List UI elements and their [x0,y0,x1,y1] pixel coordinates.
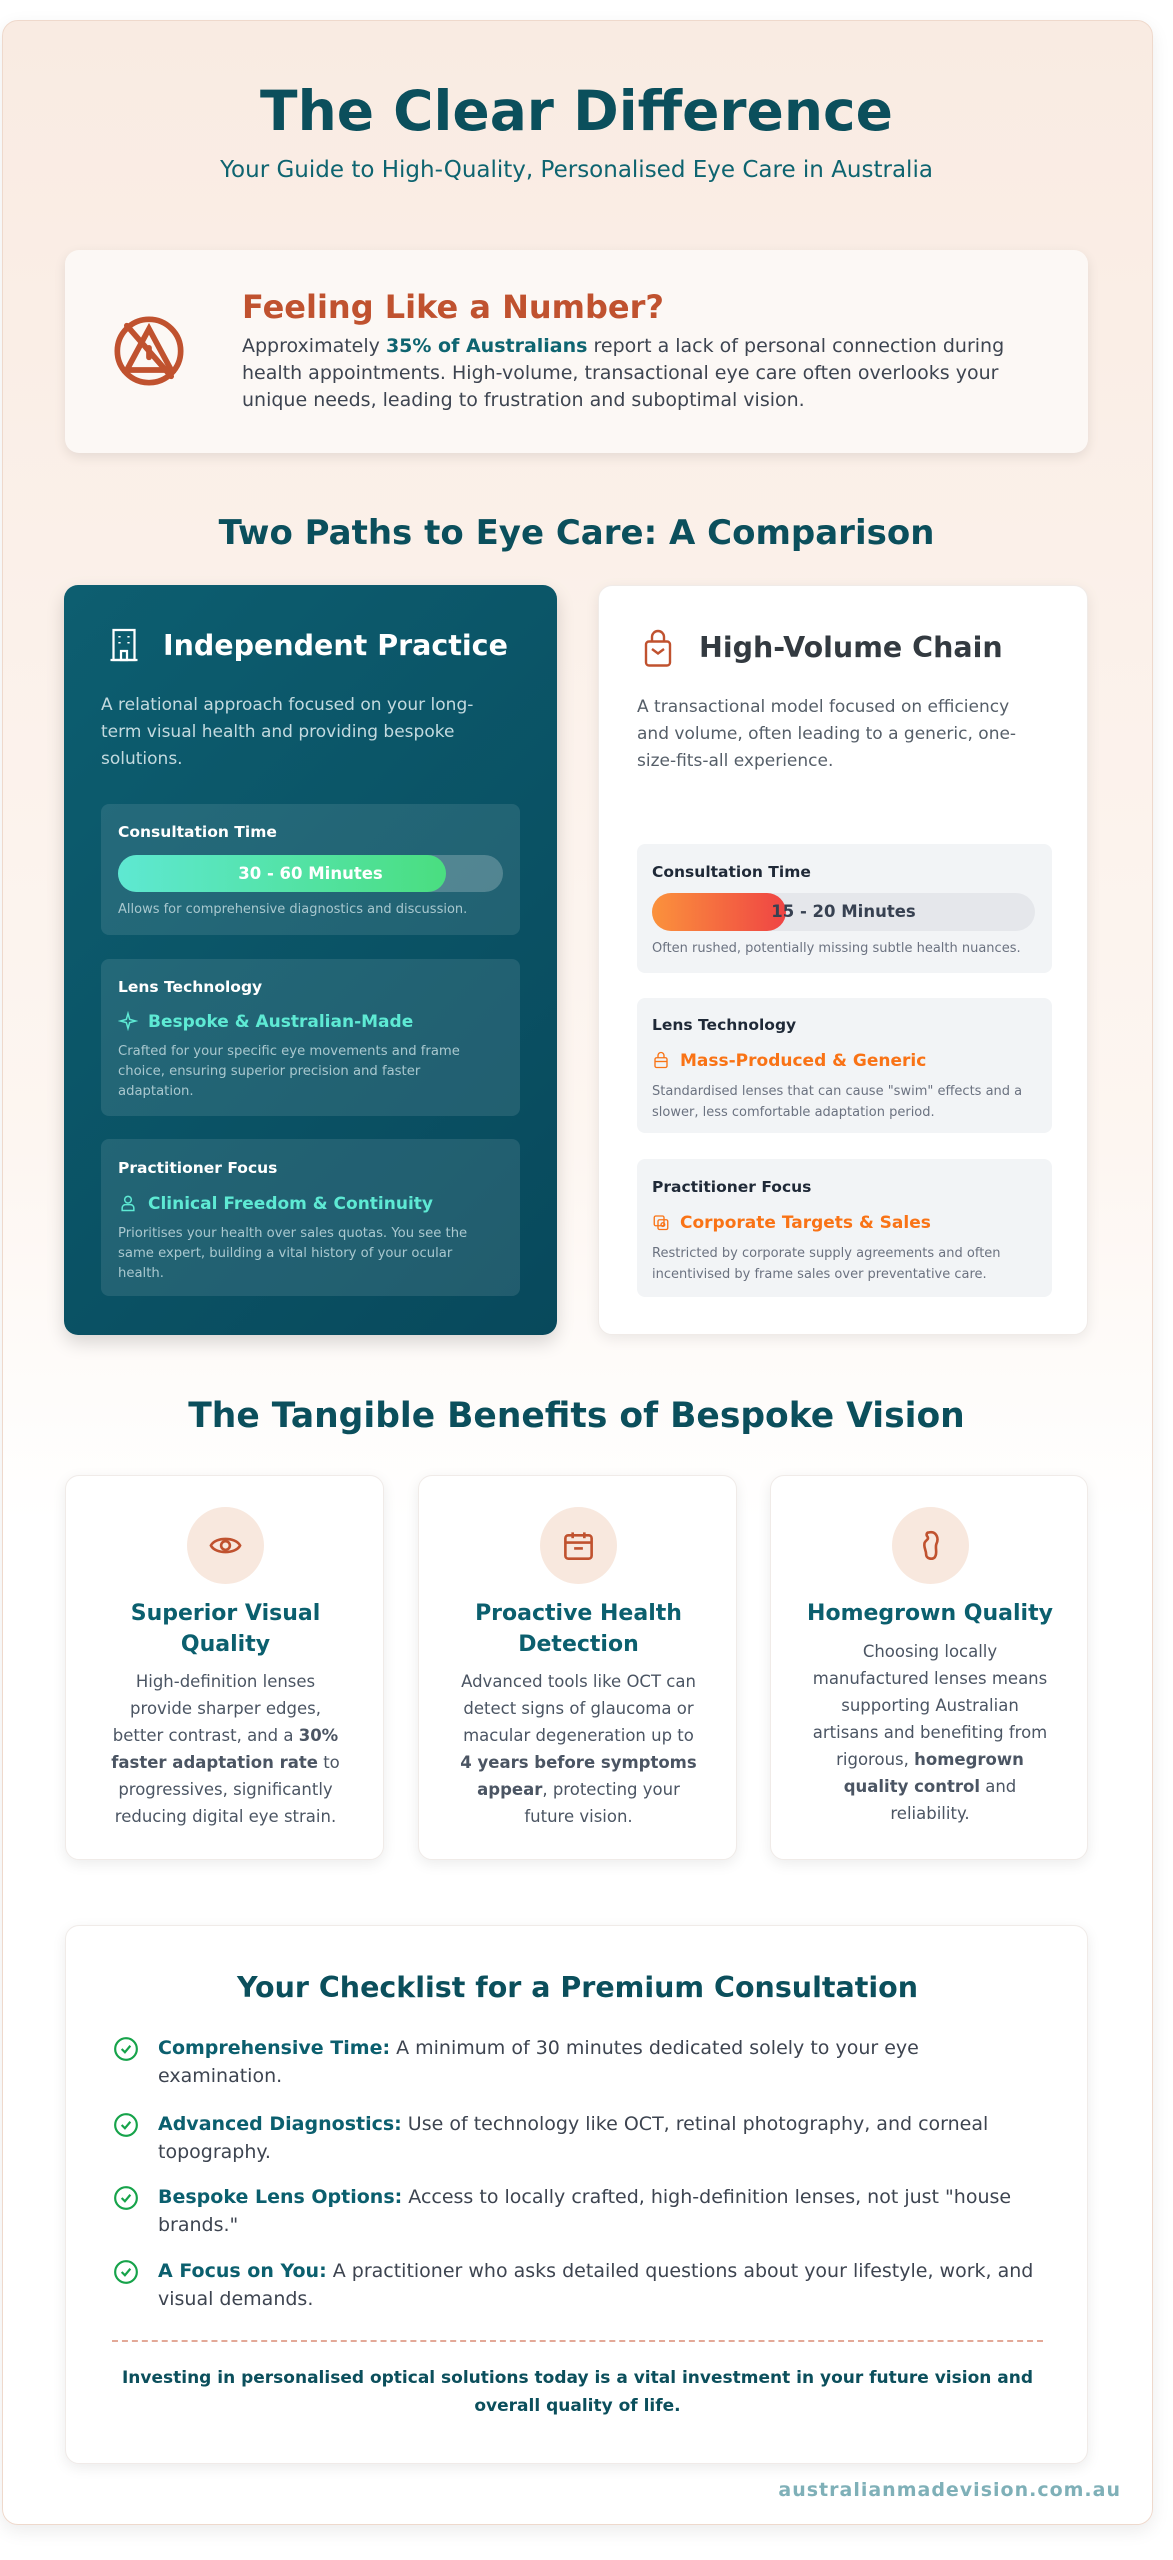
panel title: High-Volume Chain [699,631,1003,664]
box: consultation time [101,804,520,935]
card text: rigorous, homegrown [836,1750,1024,1769]
card text: reliability. [890,1804,970,1823]
box: practitioner focus: Practitioner Focus [652,1178,811,1196]
body text: health appointments. High-volume, transactional eye care often overlooks your [242,362,998,384]
item: bespoke lens options: brands." [158,2214,238,2236]
item: comprehensive time: examination. [158,2065,282,2087]
box: practitioner focus: Restricted by corporate supply agreements and often [652,1246,1001,1261]
card title: Quality [181,1632,270,1657]
box: lens technology [101,959,520,1116]
description: size-fits-all experience. [637,751,833,771]
card text: better contrast, and a 30% [113,1726,338,1745]
card text: 4 years before symptoms [460,1753,697,1772]
box: practitioner focus: Practitioner Focus [118,1159,277,1177]
box: consultation time: Consultation Time [652,863,811,881]
bar: 15-20 minutes: 15 - 20 Minutes [771,902,916,921]
bar: 30-60 minutes: 30 - 60 Minutes [238,864,383,883]
description [101,695,473,769]
card: homegrown quality [770,1475,1088,1860]
box: lens technology: slower, less comfortable adaptation period. [652,1105,935,1120]
card title: Detection [518,1632,639,1657]
panel: independent practice [64,585,557,1335]
closing statement [122,2368,1033,2416]
box: lens technology [637,998,1052,1133]
heading: comparison: Two Paths to Eye Care: A Comparison [219,513,934,553]
panel: checklist [65,1925,1088,2464]
card text: Choosing locally [863,1642,997,1661]
panel: high-volume chain [598,585,1088,1335]
subtitle: Your Guide to High-Quality, Personalised Eye Care in Australia [220,157,933,183]
item: comprehensive time: Comprehensive Time: A minimum of 30 minutes dedicated solely to your eye [158,2037,919,2059]
card text: supporting Australian [841,1696,1019,1715]
card text: quality control and [844,1777,1016,1796]
icon: warning crossed [114,316,184,386]
item: comprehensive time [114,2037,919,2087]
card text [460,1672,697,1826]
box: lens technology: choice, ensuring superior precision and faster [118,1064,420,1079]
highlight: mass produced: Mass-Produced & Generic [680,1051,926,1071]
card text: High-definition lenses [136,1672,315,1691]
item: advanced diagnostics: topography. [158,2141,271,2163]
box: consultation time [637,844,1052,973]
card: proactive health detection [418,1475,737,1860]
box: lens technology: adaptation. [118,1084,194,1099]
closing statement: Investing in personalised optical solutions today is a vital investment in your future vision and [122,2368,1033,2388]
description: solutions. [101,749,183,769]
item: bespoke lens options: Bespoke Lens Options: Access to locally crafted, high-definition lenses, not just "house [158,2186,1011,2208]
bar: 30-60 minutes [118,855,503,892]
highlight: bespoke: Bespoke & Australian-Made [148,1012,413,1032]
body text: Approximately 35% of Australians report a lack of personal connection during [242,335,1004,357]
card text: progressives, significantly [118,1780,333,1799]
body text: unique needs, leading to frustration and suboptimal vision. [242,389,805,411]
card text [813,1642,1047,1823]
card text: detect signs of glaucoma or [463,1699,694,1718]
card title [475,1601,682,1657]
box: practitioner focus [101,1139,520,1296]
card: superior visual quality [65,1475,384,1860]
box: lens technology: Lens Technology [118,978,262,996]
description: A relational approach focused on your long- [101,695,473,715]
item: focus on you: visual demands. [158,2288,313,2310]
box: lens technology: Lens Technology [652,1016,796,1034]
card title [131,1601,320,1657]
card text [111,1672,340,1826]
icon: calendar [540,1507,617,1584]
card text: provide sharper edges, [130,1699,321,1718]
box: practitioner focus: same expert, building a vital history of your ocular [118,1246,452,1261]
item: focus on you: A Focus on You: A practitioner who asks detailed questions about your lifestyle, work, and [158,2260,1033,2282]
body text [242,335,1004,411]
closing statement: overall quality of life. [474,2396,681,2416]
box: practitioner focus: Prioritises your health over sales quotas. You see the [118,1226,467,1241]
box: consultation time: Consultation Time [118,823,277,841]
heading: benefits: The Tangible Benefits of Bespoke Vision [188,1396,965,1436]
highlight: clinical freedom: Clinical Freedom & Continuity [148,1194,433,1214]
box: practitioner focus: incentivised by frame sales over preventative care. [652,1267,987,1282]
checklist heading: Your Checklist for a Premium Consultation [237,1971,918,2004]
card text: Advanced tools like OCT can [461,1672,696,1691]
title: The Clear Difference [260,79,893,143]
card text: macular degeneration up to [463,1726,694,1745]
box: lens technology: Crafted for your specific eye movements and frame [118,1044,460,1059]
card text: reducing digital eye strain. [115,1807,336,1826]
heading: Feeling Like a Number? [242,288,664,326]
description: A transactional model focused on efficiency [637,697,1009,717]
card title: Superior Visual [131,1601,320,1626]
card title: Proactive Health [475,1601,682,1626]
item: advanced diagnostics [114,2113,988,2163]
card text: artisans and benefiting from [813,1723,1047,1742]
description [637,697,1016,771]
card text: appear, protecting your [477,1780,680,1799]
card text: future vision. [524,1807,633,1826]
icon: eye [187,1507,264,1584]
card text: faster adaptation rate to [111,1753,340,1772]
footer url: australianmadevision.com.au [778,2479,1121,2501]
panel: feeling like a number [65,250,1088,453]
bar: 15-20 minutes [652,893,1035,931]
card title: Homegrown Quality [807,1601,1053,1626]
icon: map [892,1507,969,1584]
box: consultation time: Often rushed, potentially missing subtle health nuances. [652,941,1021,956]
box: lens technology: Standardised lenses that can cause "swim" effects and a [652,1084,1022,1099]
box: practitioner focus [637,1159,1052,1297]
box: consultation time: Allows for comprehensive diagnostics and discussion. [118,902,467,917]
icon: shopping bag [644,630,672,667]
item: focus on you [114,2260,1033,2310]
item: bespoke lens options [114,2186,1011,2236]
description: and volume, often leading to a generic, one- [637,724,1016,744]
card text: manufactured lenses means [813,1669,1047,1688]
icon: building [110,628,138,662]
box: practitioner focus: health. [118,1266,164,1281]
panel title: Independent Practice [163,629,508,662]
description: term visual health and providing bespoke [101,722,454,742]
highlight: corporate targets: Corporate Targets & Sales [680,1213,931,1233]
item: advanced diagnostics: Advanced Diagnostics: Use of technology like OCT, retinal photography, and corneal [158,2113,988,2135]
